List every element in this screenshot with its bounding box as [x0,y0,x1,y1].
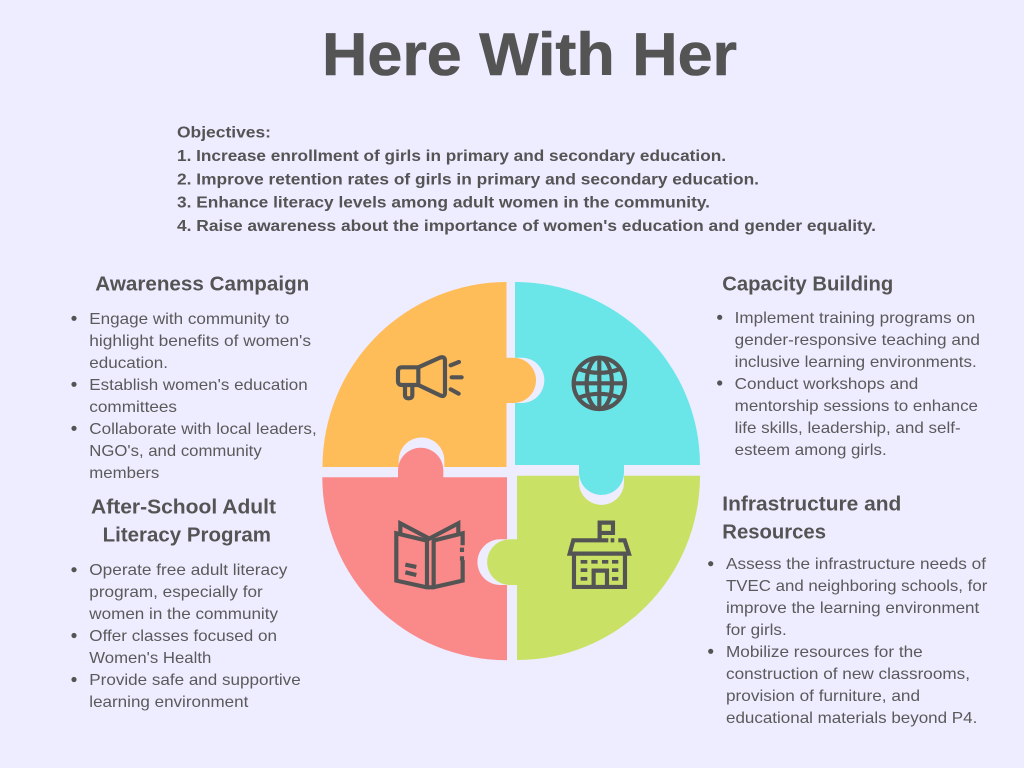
capacity building bullet list: mentorship sessions to enhance [735,398,978,415]
heading: infrastructure and resources: Resources [722,522,826,544]
icon: megaphone [398,357,462,398]
infrastructure bullet list: educational materials beyond P4. [726,710,977,727]
objectives text block: 1. Increase enrollment of girls in primary and secondary education. [177,148,726,165]
panel: capacity building [717,274,980,459]
literacy program bullet list: program, especially for [89,584,263,601]
infrastructure bullet list: provision of furniture, and [726,688,920,705]
awareness campaign bullet list: highlight benefits of women's [89,333,311,350]
literacy program bullet list: Offer classes focused on [89,628,277,645]
literacy program bullet list: Provide safe and supportive [89,672,301,689]
awareness campaign bullet list: Collaborate with local leaders, [89,421,317,438]
literacy program bullet list: Women's Health [89,650,211,667]
capacity building bullet list: esteem among girls. [735,442,887,459]
objectives text block: 2. Improve retention rates of girls in primary and secondary education. [177,171,759,188]
awareness campaign bullet list: committees [89,399,177,416]
capacity building bullet list: inclusive learning environments. [735,354,977,371]
awareness campaign bullet list: NGO's, and community [89,443,262,460]
infrastructure bullet list: Mobilize resources for the [726,644,923,661]
literacy program bullet list: Operate free adult literacy [89,562,287,579]
heading: awareness campaign: Awareness Campaign [95,274,309,296]
infrastructure bullet list [708,556,988,727]
capacity building bullet list: gender-responsive teaching and [735,332,980,349]
puzzle circle diagram [322,282,700,660]
infrastructure bullet list: Assess the infrastructure needs of [726,556,987,573]
infrastructure bullet list: TVEC and neighboring schools, for [726,578,988,595]
capacity building bullet list [717,310,980,459]
infrastructure bullet list: construction of new classrooms, [726,666,970,683]
awareness campaign bullet list: Establish women's education [89,377,308,394]
heading: infrastructure and resources: Infrastructure and [722,494,901,516]
literacy program bullet list [71,562,301,711]
heading: capacity building: Capacity Building [722,274,893,296]
awareness campaign bullet list [71,311,317,482]
awareness campaign bullet list: education. [89,355,168,372]
puzzle piece: orange [322,282,536,467]
capacity building bullet list: Implement training programs on [735,310,975,327]
infrastructure bullet list: improve the learning environment [726,600,980,617]
heading: after-school adult literacy program: After-School Adult [91,496,276,518]
puzzle piece: cyan [515,282,700,495]
panel: after-school adult literacy program [71,496,301,711]
infrastructure bullet list: for girls. [726,622,787,639]
heading: infrastructure and resources [722,494,901,544]
awareness campaign bullet list: members [89,465,159,482]
literacy program bullet list: learning environment [89,694,249,711]
literacy program bullet list: women in the community [88,606,278,623]
objectives text block: 4. Raise awareness about the importance of women's education and gender equality. [177,218,876,235]
capacity building bullet list: Conduct workshops and [735,376,918,393]
objectives text block: Objectives: [177,124,271,142]
puzzle piece: red [322,448,507,660]
objectives text block: 3. Enhance literacy levels among adult women in the community. [177,195,710,212]
icon: open book [396,523,463,587]
title: Here With Her [322,21,737,88]
capacity building bullet list: life skills, leadership, and self- [735,420,961,437]
panel: awareness campaign [71,274,317,482]
puzzle piece: green [487,476,700,660]
icon: school building [570,523,629,587]
panel: infrastructure and resources [708,494,988,727]
awareness campaign bullet list: Engage with community to [89,311,289,328]
heading: after-school adult literacy program: Literacy Program [103,525,271,547]
objectives text block [177,124,876,235]
icon: globe [573,357,625,409]
heading: after-school adult literacy program [91,496,276,547]
